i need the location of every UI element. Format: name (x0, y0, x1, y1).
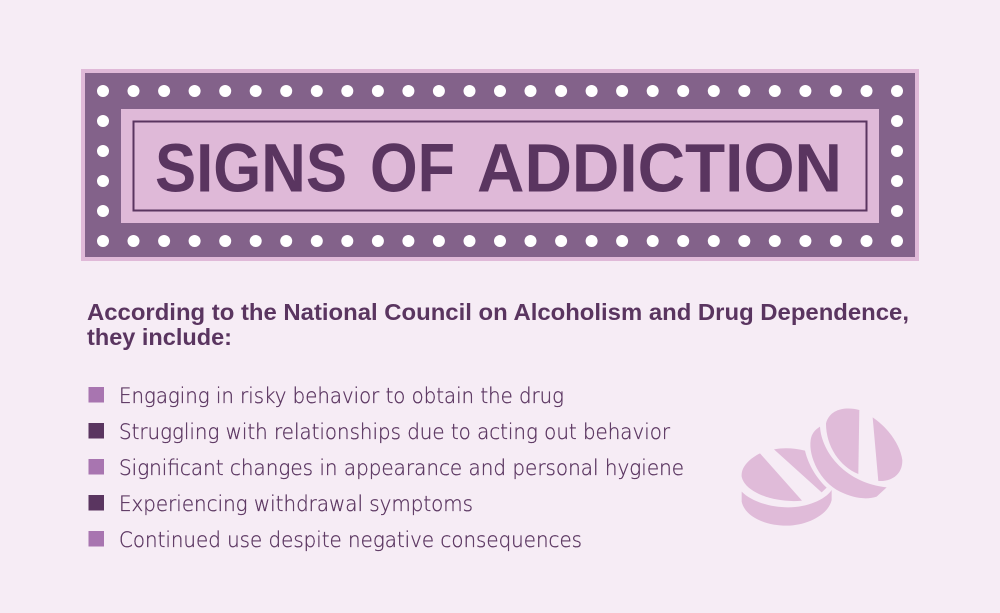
item 1: Engaging in risky behavior to obtain the drug (119, 384, 564, 408)
item 3: Significant changes in appearance and personal hygiene (119, 456, 684, 480)
right pill (810, 409, 902, 498)
item 4: Experiencing withdrawal symptoms (119, 492, 473, 516)
item 5: Continued use despite negative consequences (119, 528, 582, 552)
bullet 5 (88, 531, 104, 546)
intro text: According to the National Council on Alcoholism and Drug Dependence, (87, 299, 909, 325)
intro text (87, 299, 909, 350)
title banner (81, 69, 919, 261)
bullet 3 (88, 459, 104, 474)
marquee dots (97, 85, 903, 247)
intro text: they include: (87, 324, 232, 350)
left pill (742, 448, 832, 526)
title: SIGNS (155, 130, 347, 206)
title: OF (370, 130, 455, 206)
list of signs (88, 384, 684, 552)
icon: pills (742, 409, 902, 526)
bullet 2 (88, 423, 104, 438)
item 2: Struggling with relationships due to acting out behavior (119, 420, 670, 444)
bullet 4 (88, 495, 104, 510)
title: ADDICTION (477, 130, 842, 206)
title plate (121, 109, 879, 223)
title frame (134, 122, 866, 210)
bullet 1 (88, 387, 104, 402)
